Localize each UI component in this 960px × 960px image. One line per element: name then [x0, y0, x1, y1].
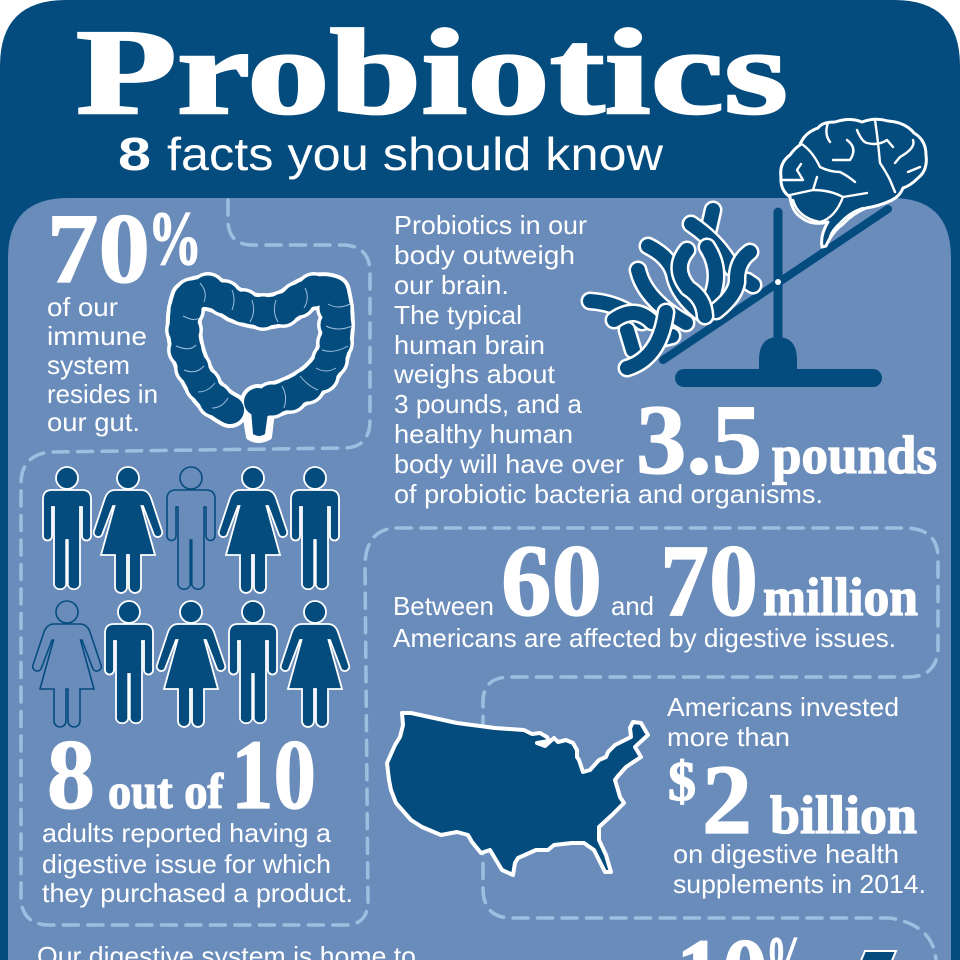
fact: 70% immune system: of our: [47, 292, 118, 322]
fact: 60 to 70 million: and: [611, 591, 654, 621]
fact: 2 billion invested: billion: [770, 785, 917, 845]
fact: probiotics outweigh brain: The typical: [394, 300, 522, 330]
fact: 8 out of 10: 10: [231, 719, 316, 830]
title: Probiotics: [76, 5, 788, 140]
fact: 8 out of 10: [42, 719, 353, 908]
icon: bacteria: [590, 210, 753, 368]
fact: 8 out of 10: 8: [47, 719, 95, 830]
fact: 60 to 70 million: Between: [393, 591, 494, 621]
icon: people group, 8 of 10: [33, 467, 349, 727]
main light panel: [8, 198, 951, 960]
subtitle: 8: [118, 128, 151, 180]
fact: 70% immune system: %: [148, 197, 202, 281]
fact: 70% immune system: 70: [47, 193, 150, 304]
fact: 2 billion invested: $: [668, 751, 696, 813]
icon: balance scale: [663, 209, 888, 387]
fact: probiotics outweigh brain: of probiotic bacteria and organisms.: [394, 479, 823, 509]
fact: probiotics outweigh brain: pounds: [772, 425, 937, 485]
icon: cropped figure: [855, 951, 896, 960]
fact: probiotics outweigh brain: 3 pounds, and a: [394, 389, 583, 419]
fact: 60 to 70 million: Americans are affected by digestive issues.: [393, 623, 896, 653]
icon: colon: [165, 272, 355, 440]
fact: probiotics outweigh brain: weighs about: [393, 359, 556, 389]
fact: 2 billion invested: Americans invested: [667, 692, 899, 722]
fact: 8 out of 10: adults reported having a: [42, 818, 332, 848]
fact: 2 billion invested: on digestive health: [673, 839, 899, 869]
subtitle: facts you should know: [167, 128, 664, 180]
fact: 2 billion invested: [667, 692, 926, 899]
fact: 70% immune system: [47, 193, 202, 437]
fact: 2 billion invested: more than: [667, 722, 790, 752]
fact: 70% immune system: our gut.: [47, 407, 140, 437]
fact: 70% immune system: system: [47, 350, 130, 380]
fact: 70% immune system: resides in: [47, 379, 158, 409]
icon: map of the United States: [387, 713, 648, 875]
fact: 8 out of 10: out of: [108, 763, 224, 819]
fact: probiotics outweigh brain: healthy human: [394, 419, 573, 449]
fact: probiotics outweigh brain: body will have over: [394, 449, 624, 479]
fact: 2 billion invested: supplements in 2014.: [673, 869, 926, 899]
fact: probiotics outweigh brain: our brain.: [394, 270, 509, 300]
fact: 60 to 70 million: million: [763, 567, 918, 627]
fact: 60 to 70 million: 70: [660, 524, 758, 638]
fact: 8 out of 10: they purchased a product.: [42, 878, 353, 908]
icon: brain: [781, 119, 926, 247]
fact: 2 billion invested: 2: [702, 744, 752, 855]
fact: 60 to 70 million: 60: [501, 524, 602, 638]
fact: probiotics outweigh brain: Probiotics in our: [394, 210, 587, 240]
fact: 70% immune system: immune: [47, 321, 147, 351]
fact: 8 out of 10: digestive issue for which: [42, 849, 331, 879]
fact: probiotics outweigh brain: [393, 210, 937, 509]
fact: probiotics outweigh brain: human brain: [394, 330, 545, 360]
fact: 60 to 70 million: [393, 524, 918, 653]
fact: probiotics outweigh brain: body outweigh: [394, 240, 575, 270]
fact: probiotics outweigh brain: 3.5: [636, 384, 762, 495]
